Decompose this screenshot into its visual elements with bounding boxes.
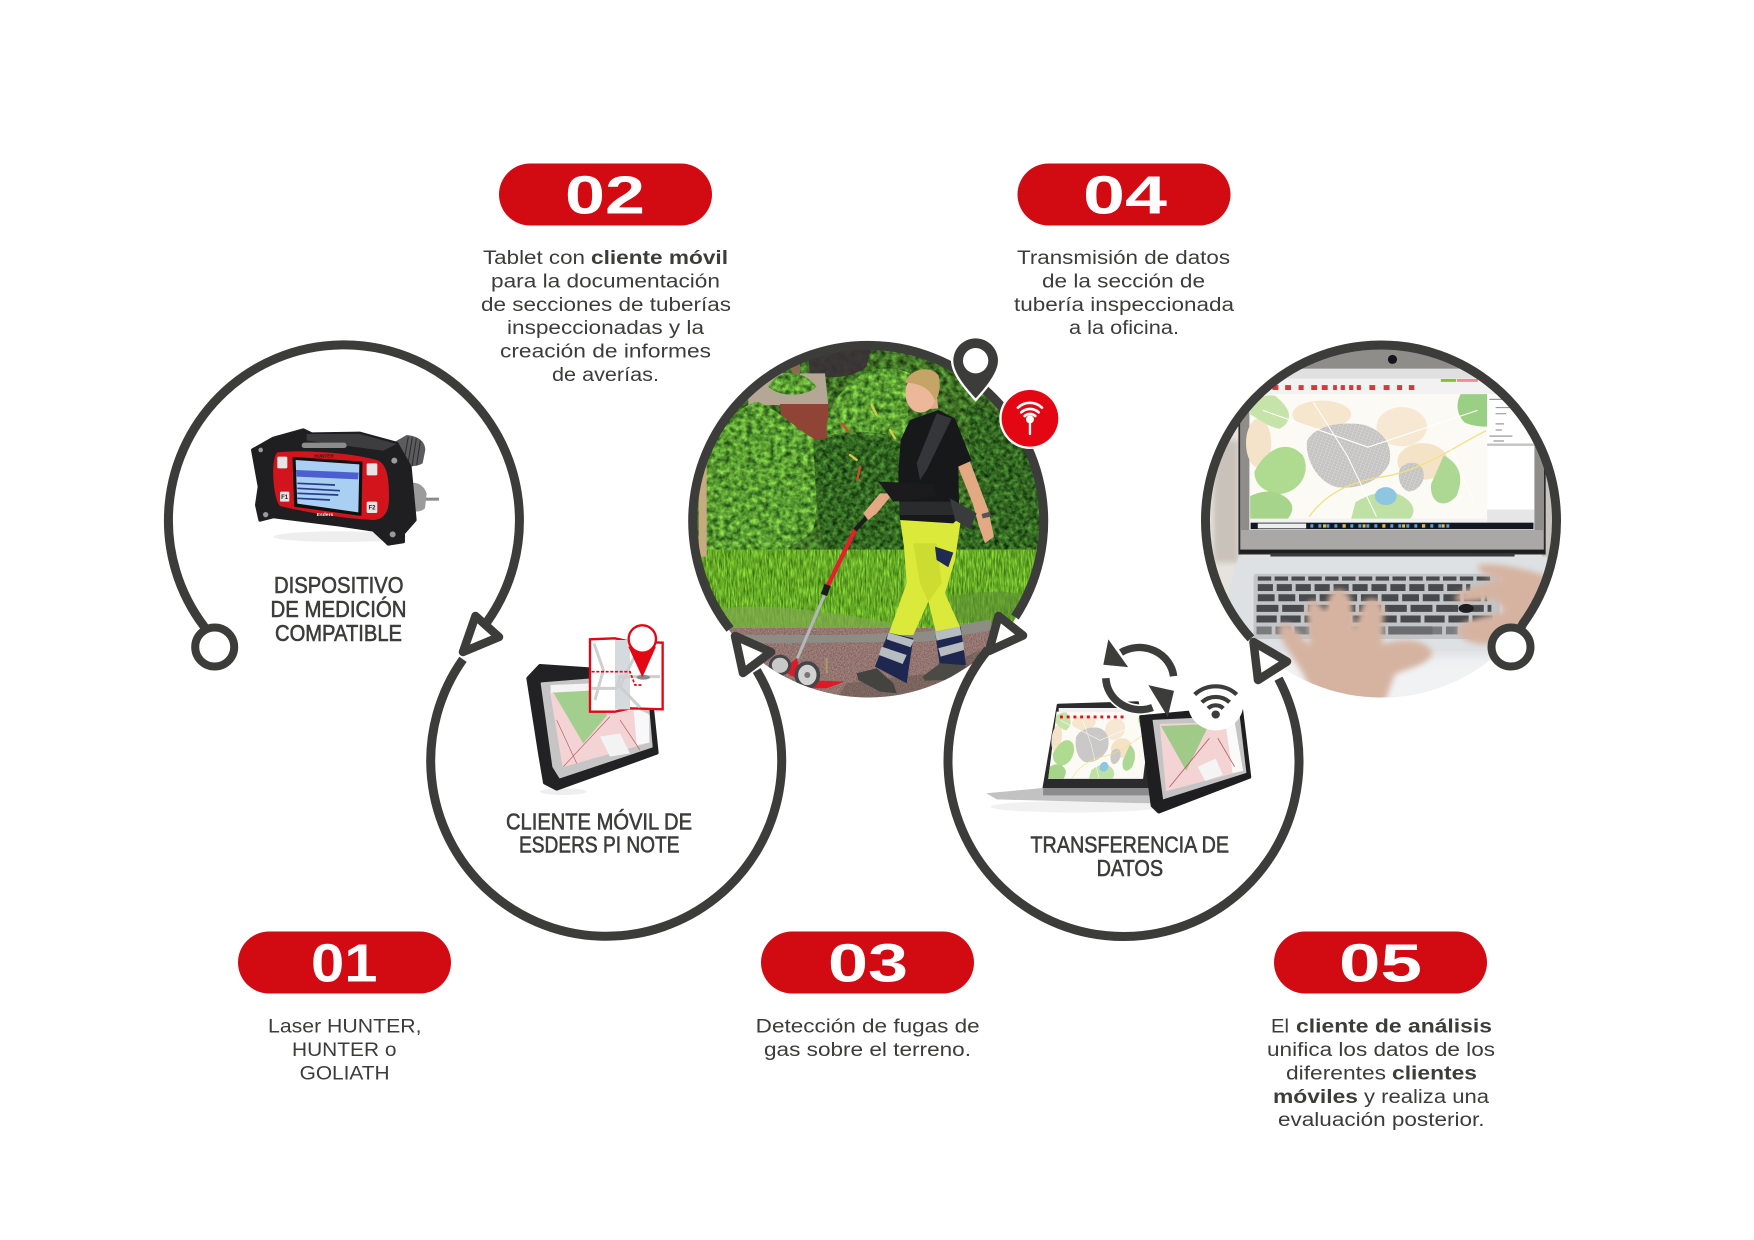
icon: location pin bbox=[953, 338, 998, 398]
step badge 03: 03 bbox=[828, 934, 908, 994]
step badge 05: 05 bbox=[1339, 934, 1422, 994]
arms bbox=[957, 462, 994, 543]
text: step 04 bbox=[1014, 248, 1234, 339]
step badge 03 bbox=[761, 932, 974, 994]
image: Hunter measuring device: F1 bbox=[281, 495, 289, 501]
text: step 04: tubería inspeccionada bbox=[1014, 295, 1234, 316]
label: mobile client: CLIENTE MÓVIL DE bbox=[506, 809, 692, 835]
photo: laptop with analysis client bbox=[1210, 350, 1552, 698]
label: data transfer: TRANSFERENCIA DE bbox=[1030, 832, 1229, 858]
torso bbox=[898, 410, 972, 523]
label: device: DISPOSITIVO bbox=[274, 572, 404, 598]
step badge 02 bbox=[499, 164, 712, 226]
text: step 01: HUNTER o bbox=[292, 1040, 396, 1061]
label: device: DE MEDICIÓN bbox=[270, 596, 406, 622]
text: step 04: de la sección de bbox=[1042, 271, 1205, 292]
icon: red signal badge bbox=[999, 388, 1061, 449]
legs bbox=[888, 518, 961, 635]
text: step 05: evaluación posterior. bbox=[1278, 1110, 1484, 1131]
text: step 03 bbox=[756, 1016, 980, 1061]
arrow 3 to 4 bbox=[989, 616, 1023, 651]
text: step 05: unifica los datos de los bbox=[1267, 1040, 1495, 1061]
hands bbox=[1279, 590, 1432, 710]
wifi bbox=[1188, 677, 1243, 730]
step badge 01 bbox=[238, 932, 451, 994]
image: Hunter measuring device: F2 bbox=[368, 506, 376, 512]
text: step 05 bbox=[1267, 1016, 1495, 1131]
ring 3 bbox=[693, 345, 1044, 629]
folded map bbox=[590, 638, 663, 712]
text: step 05: El bbox=[1271, 1016, 1289, 1038]
text: step 05: clientes bbox=[1392, 1064, 1477, 1084]
stick bbox=[827, 530, 855, 587]
text: step 03: Detección de fugas de bbox=[756, 1016, 980, 1038]
text: step 05: móviles bbox=[1273, 1087, 1358, 1108]
sync arrows bbox=[1121, 647, 1174, 676]
ring 1 bbox=[168, 345, 519, 644]
text: step 02: cliente móvil bbox=[591, 248, 728, 269]
arrow 4 to 5 bbox=[1254, 642, 1287, 680]
ring 5 bbox=[1205, 345, 1556, 646]
text: step 04: a la oficina. bbox=[1069, 318, 1179, 339]
text: step 01: Laser HUNTER, bbox=[268, 1016, 422, 1038]
text: step 02: para la documentación bbox=[491, 271, 720, 292]
text: step 05: cliente de análisis bbox=[1296, 1016, 1492, 1038]
text: step 02: de averías. bbox=[552, 365, 659, 386]
label: mobile client bbox=[506, 809, 692, 858]
label: data transfer: DATOS bbox=[1097, 855, 1163, 881]
image: Hunter measuring device: Esders bbox=[317, 512, 334, 518]
step badge 05 bbox=[1274, 932, 1487, 994]
text: step 02: inspeccionadas y la bbox=[507, 318, 705, 339]
step badge 04 bbox=[1018, 164, 1230, 226]
label: data transfer bbox=[1030, 832, 1229, 881]
text: step 03: gas sobre el terreno. bbox=[764, 1040, 971, 1061]
text: step 04: Transmisión de datos bbox=[1017, 248, 1230, 269]
step badge 04: 04 bbox=[1083, 166, 1167, 226]
text: step 05: diferentes bbox=[1286, 1064, 1386, 1084]
photo: technician walking with gas detector bbox=[697, 350, 1040, 698]
image: laptop and tablet with sync icons bbox=[986, 639, 1249, 812]
step badge 02: 02 bbox=[565, 166, 645, 226]
ring start marker bbox=[195, 628, 234, 666]
ring 2 bbox=[431, 659, 782, 936]
arrow 2 to 3 bbox=[735, 636, 771, 673]
label: device: COMPATIBLE bbox=[275, 620, 402, 646]
text: step 01 bbox=[268, 1016, 422, 1084]
text: step 02: Tablet con bbox=[483, 248, 585, 269]
text: step 02: creación de informes bbox=[500, 342, 711, 363]
text: step 01: GOLIATH bbox=[300, 1064, 390, 1084]
step badge 01: 01 bbox=[311, 934, 378, 994]
image: rugged tablet with map bbox=[528, 625, 663, 795]
head bbox=[929, 398, 938, 410]
text: step 02: de secciones de tuberías bbox=[481, 295, 731, 316]
image: Hunter measuring device: HUNTER bbox=[314, 453, 334, 458]
infographic bbox=[164, 164, 1561, 1130]
text: step 02 bbox=[481, 248, 731, 386]
ring 4 bbox=[948, 650, 1299, 937]
label: mobile client: ESDERS PI NOTE bbox=[519, 832, 680, 858]
image: Hunter measuring device bbox=[253, 430, 439, 544]
label: device bbox=[270, 572, 406, 646]
ring end marker bbox=[1492, 628, 1530, 666]
text: step 05: y realiza una bbox=[1364, 1087, 1489, 1108]
arrow 1 to 2 bbox=[463, 616, 499, 652]
